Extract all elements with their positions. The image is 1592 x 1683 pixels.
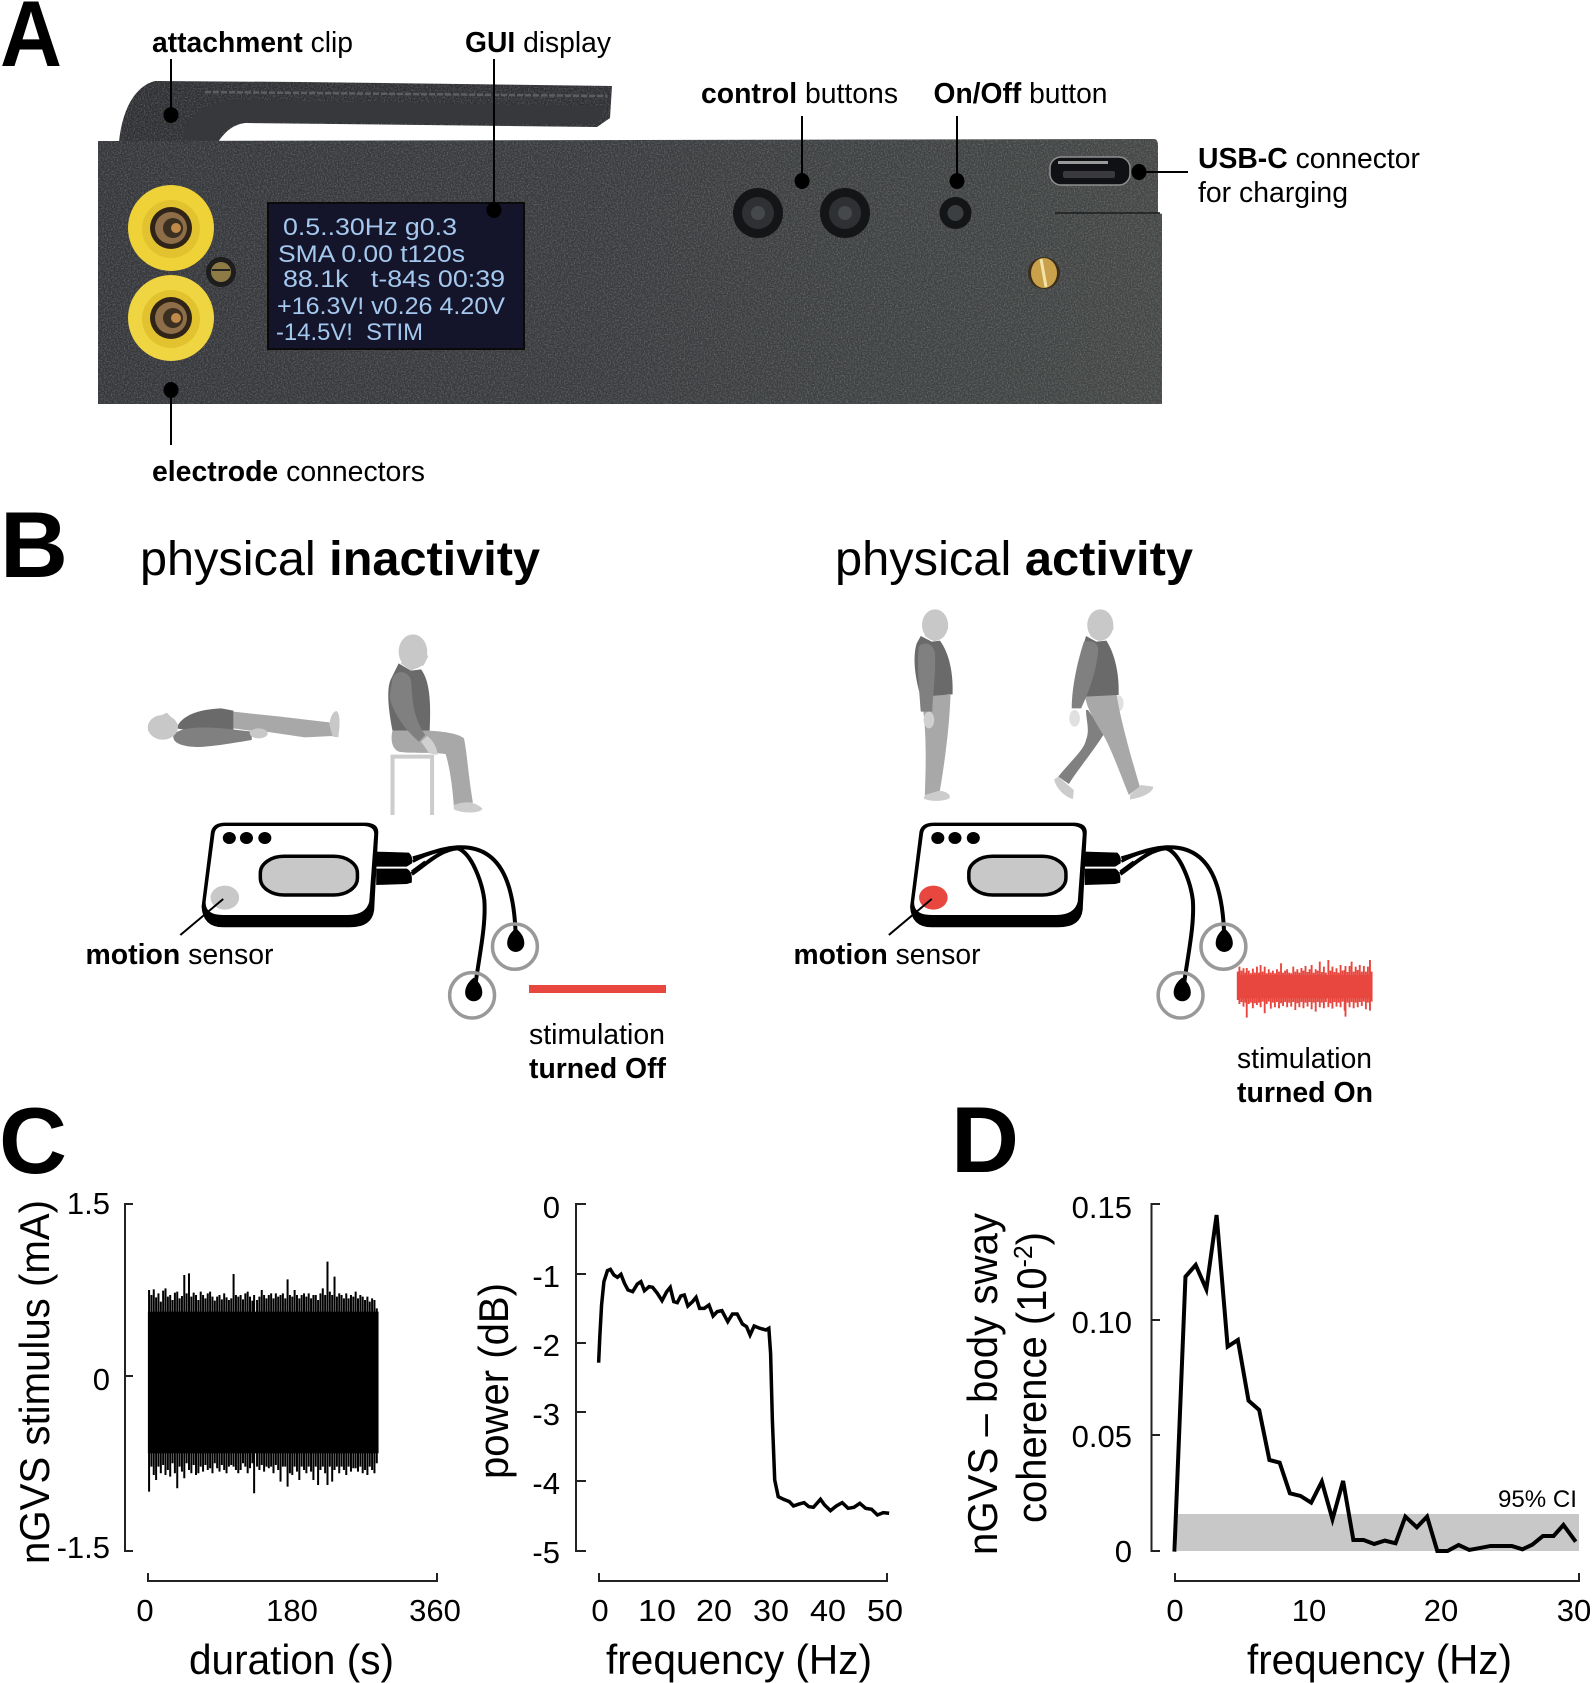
panel letter D: D	[951, 1087, 1019, 1192]
x tick labels: 10	[1292, 1593, 1326, 1628]
heading: physical inactivity: physical inactivity	[140, 533, 540, 586]
callout: electrode connectors	[152, 382, 425, 488]
panel A: device photo	[0, 0, 1420, 488]
label: stimulation turned off: stimulation	[529, 1019, 665, 1051]
x tick labels: 180	[266, 1593, 318, 1628]
on/off button	[940, 197, 972, 229]
panel letter C: C	[0, 1088, 67, 1193]
figures: standing and walking person	[915, 609, 1153, 801]
seam near USB section	[1055, 212, 1160, 214]
x tick labels	[1166, 1593, 1591, 1628]
chart: coherence	[959, 1190, 1591, 1683]
y tick labels: 0	[543, 1190, 560, 1225]
y tick labels: 1.5	[67, 1186, 110, 1221]
callout: control buttons	[701, 78, 898, 189]
device schematic: sensor off	[180, 823, 537, 1018]
GUI display: 0.5..30Hz g0.3	[283, 214, 457, 241]
callout: USB-C connector: USB-C connector	[1198, 143, 1420, 175]
y axis titles: -2	[1008, 1245, 1038, 1267]
callout: GUI display: GUI display	[465, 27, 612, 59]
GUI display: -14.5V! STIM	[276, 319, 423, 346]
GUI display: 88.1k t-84s 00:39	[283, 266, 505, 293]
label: stimulation turned on: stimulation	[1237, 1043, 1372, 1075]
y tick labels: 0	[93, 1362, 110, 1397]
y tick labels: -4	[532, 1466, 560, 1501]
y axis title: power (dB)	[470, 1283, 517, 1479]
y axis titles: )	[1008, 1232, 1055, 1245]
y axis	[1152, 1204, 1160, 1551]
callout: control buttons: control buttons	[701, 78, 898, 110]
connector screw	[206, 257, 236, 287]
case screw	[1028, 257, 1060, 289]
label: motion sensor: motion sensor	[86, 939, 274, 971]
panel letter B: B	[0, 492, 68, 597]
x tick labels: 20	[1424, 1593, 1458, 1628]
x tick labels	[136, 1593, 461, 1628]
y tick labels: 0.05	[1072, 1419, 1132, 1454]
GUI display: +16.3V! v0.26 4.20V	[277, 293, 505, 320]
x tick labels: 10	[638, 1593, 676, 1628]
x axis title: duration (s)	[189, 1636, 394, 1683]
y tick labels: 0	[1115, 1534, 1132, 1569]
x tick labels: 20	[696, 1593, 732, 1628]
callout: electrode connectors: electrode connectors	[152, 456, 425, 488]
y tick labels: 0.15	[1072, 1190, 1132, 1225]
electrode connectors	[128, 185, 214, 361]
spectrum curve	[599, 1269, 889, 1515]
y tick labels: -2	[532, 1328, 560, 1363]
x tick labels	[591, 1593, 903, 1628]
coherence curve	[1174, 1215, 1576, 1552]
y axis title: nGVS stimulus (mA)	[11, 1200, 58, 1564]
callout: on/off button: On/Off button	[934, 78, 1108, 110]
x tick labels: 30	[1557, 1593, 1591, 1628]
callout: USB-C connector: for charging	[1198, 177, 1348, 209]
label: stimulation turned off: turned Off	[529, 1053, 666, 1085]
callout: on/off button	[934, 78, 1108, 189]
y tick labels	[532, 1190, 560, 1570]
noise signal	[148, 1262, 379, 1493]
95% CI band	[1177, 1514, 1579, 1551]
x tick labels: 50	[867, 1593, 903, 1628]
y axis	[576, 1204, 586, 1551]
y axis	[125, 1204, 133, 1551]
heading: physical activity: physical activity	[835, 533, 1193, 586]
stimulation on noise trace	[1237, 960, 1372, 1018]
GUI display: SMA 0.00 t120s	[278, 241, 465, 268]
y tick labels	[57, 1186, 110, 1565]
y tick labels: -5	[532, 1535, 560, 1570]
x axis	[1175, 1573, 1579, 1581]
chart: power spectrum	[470, 1190, 903, 1683]
x tick labels: 0	[591, 1593, 609, 1628]
x axis	[148, 1573, 437, 1581]
panel B: physical inactivity	[0, 492, 666, 1085]
label: stimulation turned on: turned On	[1237, 1077, 1373, 1109]
y tick labels: -1.5	[57, 1530, 110, 1565]
panel B: physical activity	[794, 533, 1373, 1109]
y axis titles: coherence (10	[1008, 1254, 1055, 1523]
label: motion sensor: motion sensor	[794, 939, 981, 971]
callout: attachment clip	[152, 27, 353, 123]
motion sensor inactive	[211, 886, 239, 910]
x axis title: frequency (Hz)	[606, 1636, 872, 1683]
device body	[98, 139, 1162, 404]
stimulation off flat line	[529, 985, 666, 993]
x tick labels: 0	[1166, 1593, 1184, 1628]
y tick labels: 0.10	[1072, 1305, 1132, 1340]
device schematic: sensor on	[889, 823, 1246, 1018]
x tick labels: 30	[753, 1593, 789, 1628]
x axis title: frequency (Hz)	[1247, 1636, 1512, 1683]
callout: USB-C connector	[1132, 143, 1420, 209]
x tick labels: 40	[810, 1593, 846, 1628]
95% CI label: 95% CI	[1498, 1486, 1577, 1513]
motion sensor active	[919, 886, 948, 910]
attachment clip	[119, 81, 612, 142]
y axis titles: nGVS – body sway	[959, 1213, 1006, 1555]
y tick labels: -1	[532, 1259, 560, 1294]
x tick labels: 0	[136, 1593, 154, 1628]
y tick labels: -3	[532, 1397, 560, 1432]
callout: GUI display	[465, 27, 612, 218]
USB-C connector	[1050, 157, 1130, 185]
x tick labels: 360	[409, 1593, 461, 1628]
figures: lying and sitting person	[148, 634, 482, 815]
y axis titles	[959, 1213, 1055, 1555]
label: stimulation turned off	[529, 1019, 666, 1085]
GUI display	[268, 203, 524, 349]
chart: nGVS stimulus over time	[11, 1186, 461, 1683]
label: stimulation turned on	[1237, 1043, 1373, 1109]
y tick labels	[1072, 1190, 1132, 1569]
control buttons	[733, 188, 870, 238]
x axis	[599, 1573, 887, 1581]
callout: attachment clip: attachment clip	[152, 27, 353, 59]
